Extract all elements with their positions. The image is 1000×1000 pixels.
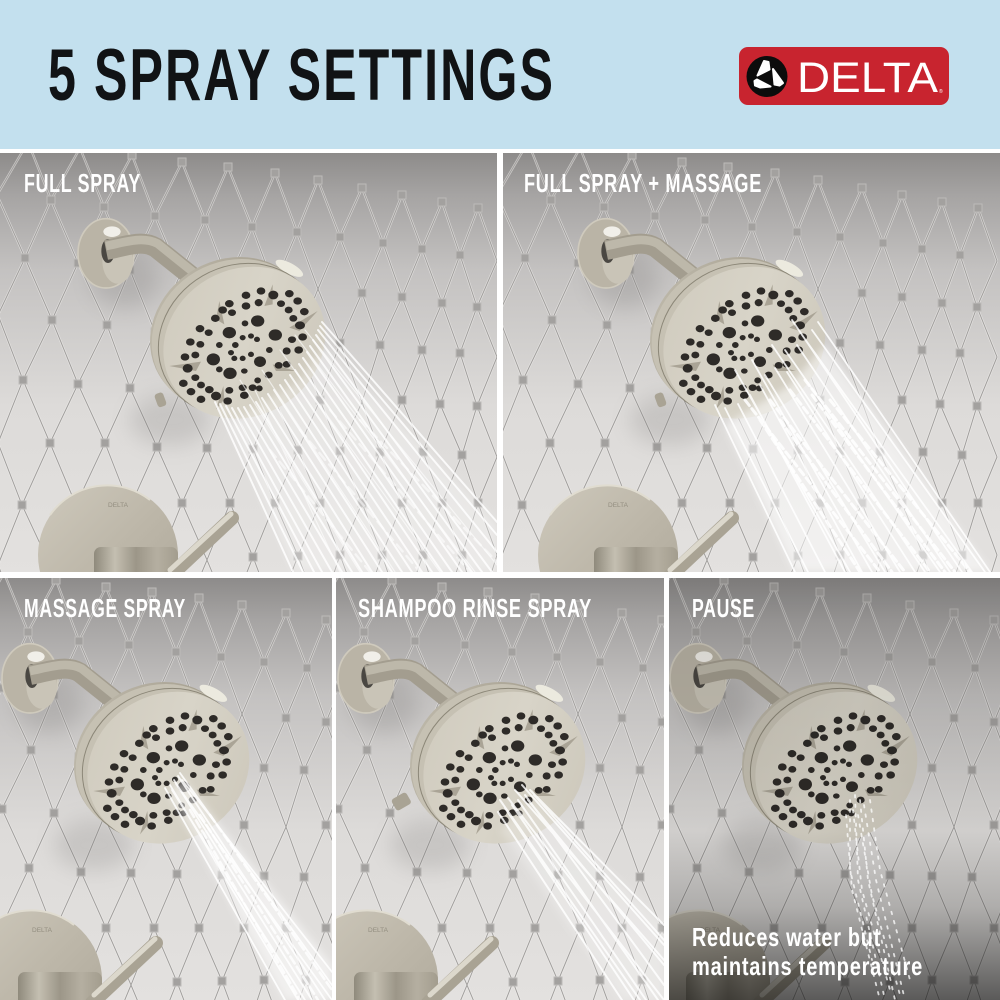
selector knob (154, 392, 166, 408)
logo: Delta (739, 47, 949, 105)
label: MASSAGE SPRAY (24, 593, 186, 623)
panel: shampoo rinse spray (336, 578, 664, 1000)
panel: pause (669, 578, 1000, 1000)
label: FULL SPRAY (24, 168, 141, 198)
label: SHAMPOO RINSE SPRAY (358, 593, 592, 623)
header band (0, 0, 1000, 149)
selector knob (392, 792, 411, 810)
caption: maintains temperature (692, 951, 923, 981)
water: full spray + massage (715, 320, 990, 572)
logo: Delta: DELTA (797, 54, 938, 102)
panel: full spray + massage (503, 153, 1000, 572)
caption: Reduces water but (692, 922, 881, 952)
water: full spray (215, 322, 497, 572)
label: FULL SPRAY + MASSAGE (524, 168, 762, 198)
panel: massage spray (0, 578, 332, 1000)
panel: full spray (0, 153, 497, 572)
water: shampoo rinse (498, 785, 664, 1000)
caption (693, 927, 922, 980)
logo: Delta: ® (939, 88, 943, 95)
title: 5 SPRAY SETTINGS (48, 35, 555, 116)
water: massage jet (165, 773, 332, 1000)
water: pause trickle (846, 795, 910, 1000)
bottom shade (669, 578, 1000, 1000)
selector knob (654, 392, 666, 408)
label: PAUSE (692, 593, 755, 623)
